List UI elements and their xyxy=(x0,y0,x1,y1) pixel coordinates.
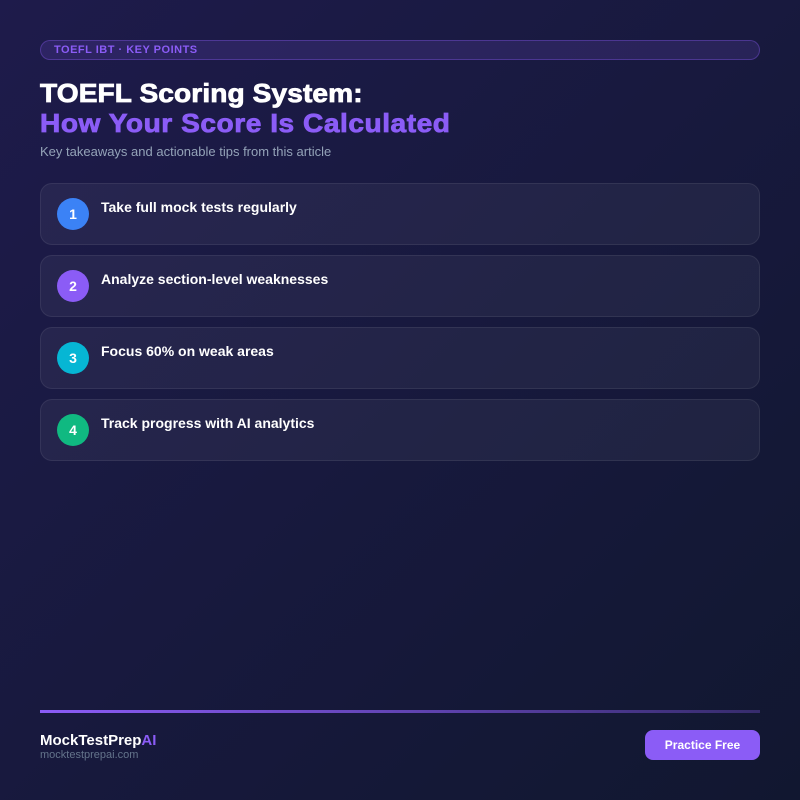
title line 2: How Your Score Is Calculated xyxy=(40,108,450,138)
badge: TOEFL iBT key points xyxy=(40,40,760,60)
number badge 2 xyxy=(57,270,89,302)
number badge 3 xyxy=(57,342,89,374)
panel: key point 2 xyxy=(40,255,760,317)
number badge 4: 4 xyxy=(69,422,77,438)
call to action button xyxy=(645,730,760,760)
call to action button: Practice Free xyxy=(665,738,740,752)
point text 4: Track progress with AI analytics xyxy=(101,415,314,431)
panel: key point 4 xyxy=(40,399,760,461)
panel: key point 1 xyxy=(40,183,760,245)
title line 1: TOEFL Scoring System: xyxy=(40,78,363,108)
subtitle: Key takeaways and actionable tips from this article xyxy=(40,144,331,159)
number badge 4 xyxy=(57,414,89,446)
point text 2: Analyze section-level weaknesses xyxy=(101,271,328,287)
number badge 1 xyxy=(57,198,89,230)
number badge 2: 2 xyxy=(69,278,77,294)
point text 3: Focus 60% on weak areas xyxy=(101,343,274,359)
number badge 1: 1 xyxy=(69,206,77,222)
website url: mocktestprepai.com xyxy=(40,749,138,761)
brand name: MockTestPrepAI xyxy=(40,732,156,749)
panel: key point 3 xyxy=(40,327,760,389)
badge: TOEFL iBT key points: TOEFL IBT · KEY POINTS xyxy=(54,44,198,56)
point text 1: Take full mock tests regularly xyxy=(101,199,297,215)
number badge 3: 3 xyxy=(69,350,77,366)
